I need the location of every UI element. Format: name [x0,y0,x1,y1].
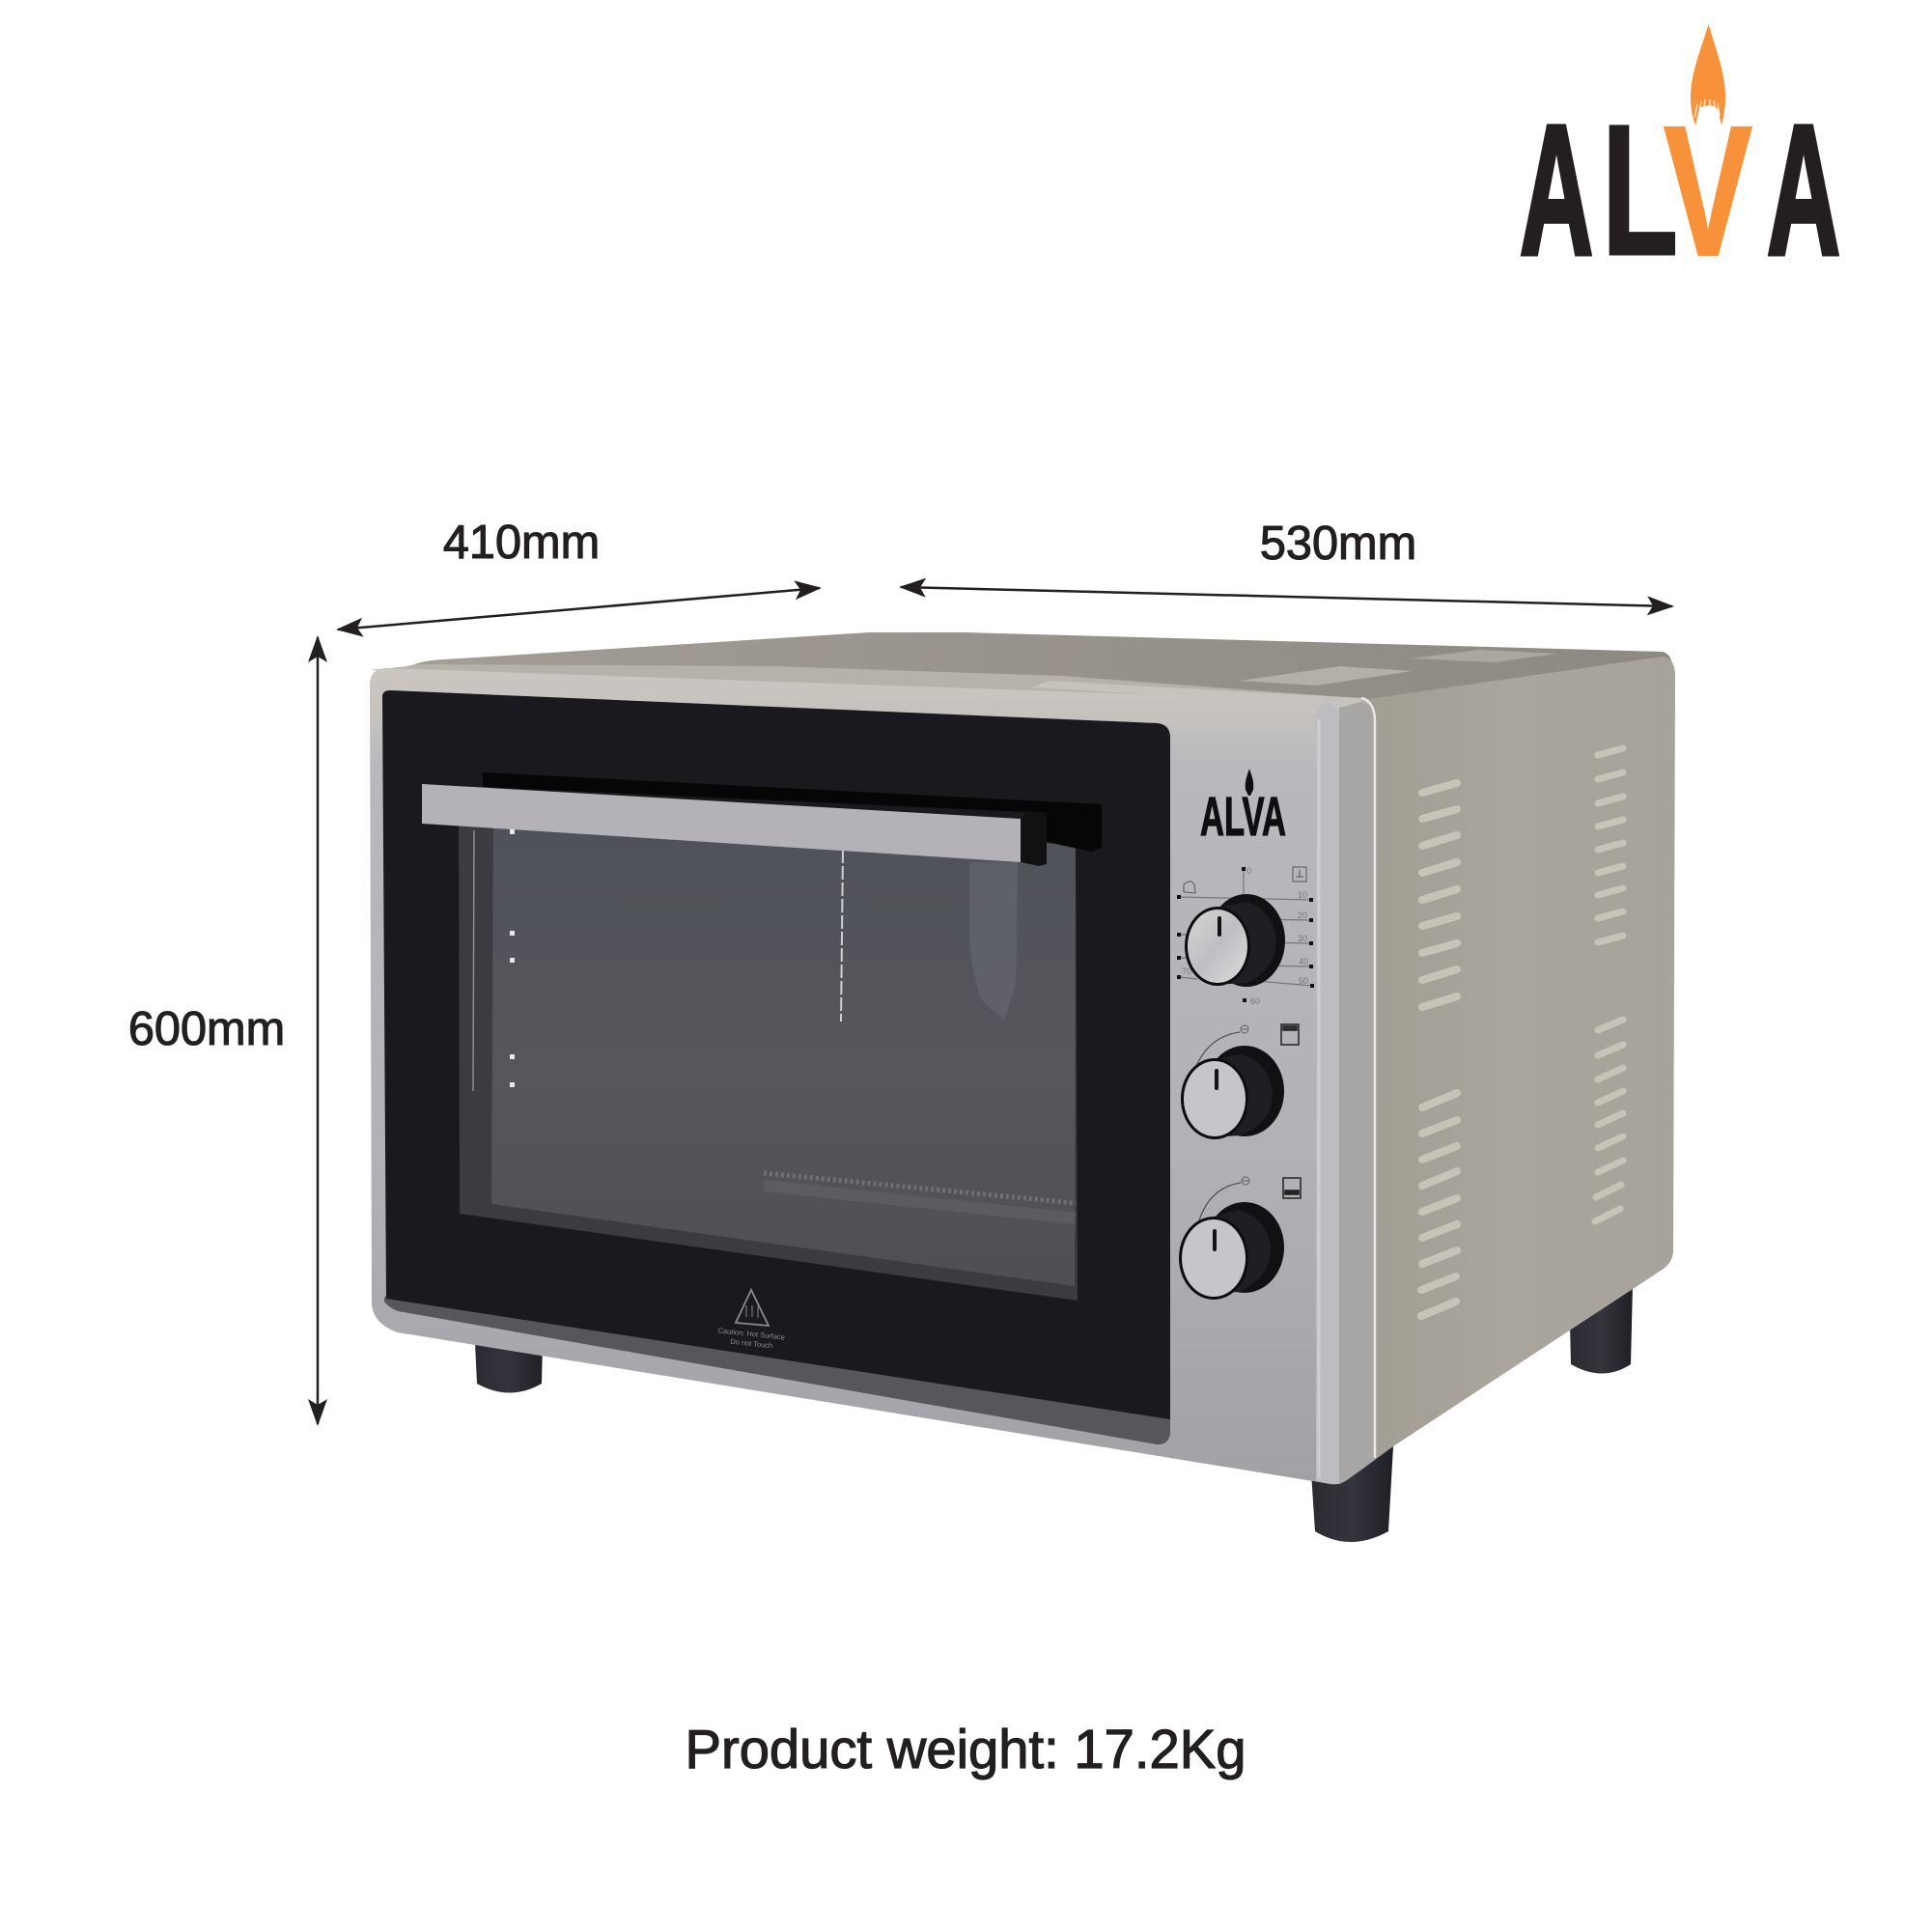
small logo text: ALVA [1200,786,1286,848]
logo letters: V [1664,87,1752,294]
left edge reflection line [473,830,474,1091]
vents column 2 lower [1595,1020,1623,1221]
arrow: depth [338,588,820,630]
seam highlight [1361,698,1375,1458]
window inner pane [491,821,1076,1286]
timer dial markings [1177,866,1314,1006]
logo letters: A [1767,86,1840,294]
oven door black glass [382,690,1170,1419]
oven icon: top element [1281,1024,1299,1045]
vents on side panel [1421,748,1623,1316]
dial numbers: 10 [1298,890,1307,900]
knob: function arc [1196,1032,1240,1066]
oven front frame [370,668,1375,1484]
dial numbers: 30 [1298,934,1307,943]
door handle [422,784,1047,866]
dial numbers: 40 [1299,957,1308,966]
oven front right leg [1311,1446,1393,1542]
top surface pale strip [386,664,1368,707]
oven product illustration [370,632,1675,1542]
logo letters: L [1602,86,1678,294]
timer icon box [1293,867,1306,882]
arrow: height [317,637,319,1424]
handle black recess [483,772,1102,852]
arrow: width [901,587,1672,606]
oven rack [764,1173,1076,1203]
logo letters [1520,86,1840,294]
knob: temperature arc [1198,1183,1241,1223]
knob: function symbol [1241,1025,1248,1033]
oven icon: bottom element [1283,1178,1301,1198]
dial numbers [1182,866,1308,1006]
product weight caption: Product weight: 17.2Kg [686,1719,1246,1779]
rack position dots [510,829,515,1087]
top label: patch [1240,666,1413,686]
dial numbers: 70 [1182,966,1191,976]
warning heat icon [746,1305,758,1318]
vents column 2 upper [1598,748,1623,942]
dimension label: width: 530mm [1260,518,1416,570]
knob: function [1181,1046,1284,1139]
logo letters: A [1520,86,1593,294]
oven window [459,811,1078,1301]
logo flame [1691,24,1725,126]
panel brand logo [1200,769,1286,848]
warning text line 2: Do not Touch [730,1337,773,1350]
oven back left leg [475,1342,543,1392]
oven top surface [370,632,1672,707]
knob: timer [1185,894,1285,987]
knob: temperature [1179,1202,1284,1300]
dial numbers: 20 [1298,910,1307,920]
vents column 1 upper [1422,783,1457,1007]
dial numbers: 60 [1250,996,1260,1006]
small flame [1246,769,1253,796]
dial lines [1179,869,1312,986]
brand logo: ALVA [1520,24,1840,294]
vents column 1 lower [1421,1093,1457,1316]
window reflection [969,862,1018,1021]
rack glow [764,1186,1076,1218]
dashed reflection line [841,850,843,1022]
handle end cap [1021,811,1047,866]
dial numbers: 50 [1299,976,1308,986]
dial numbers: 0 [1246,866,1251,876]
knob: temperature symbol [1242,1177,1249,1185]
top label: small patch [1410,650,1557,662]
bevel highlight [1317,719,1321,1477]
warning triangle [717,1290,785,1350]
dimension label: depth: 410mm [443,517,600,569]
oven side panel [1368,657,1675,1460]
top label: sticker [1031,681,1363,705]
warning text line 1: Caution: Hot Surface [717,1326,785,1342]
dimension label: height: 600mm [128,1003,285,1055]
front right bevel: darker return [1339,702,1375,1484]
dial tick squares [1177,867,1314,1002]
hand icon [1184,882,1195,893]
front right bevel: light edge [1316,703,1339,1484]
oven back right leg [1569,1284,1633,1373]
door lower lip [384,1297,1170,1444]
